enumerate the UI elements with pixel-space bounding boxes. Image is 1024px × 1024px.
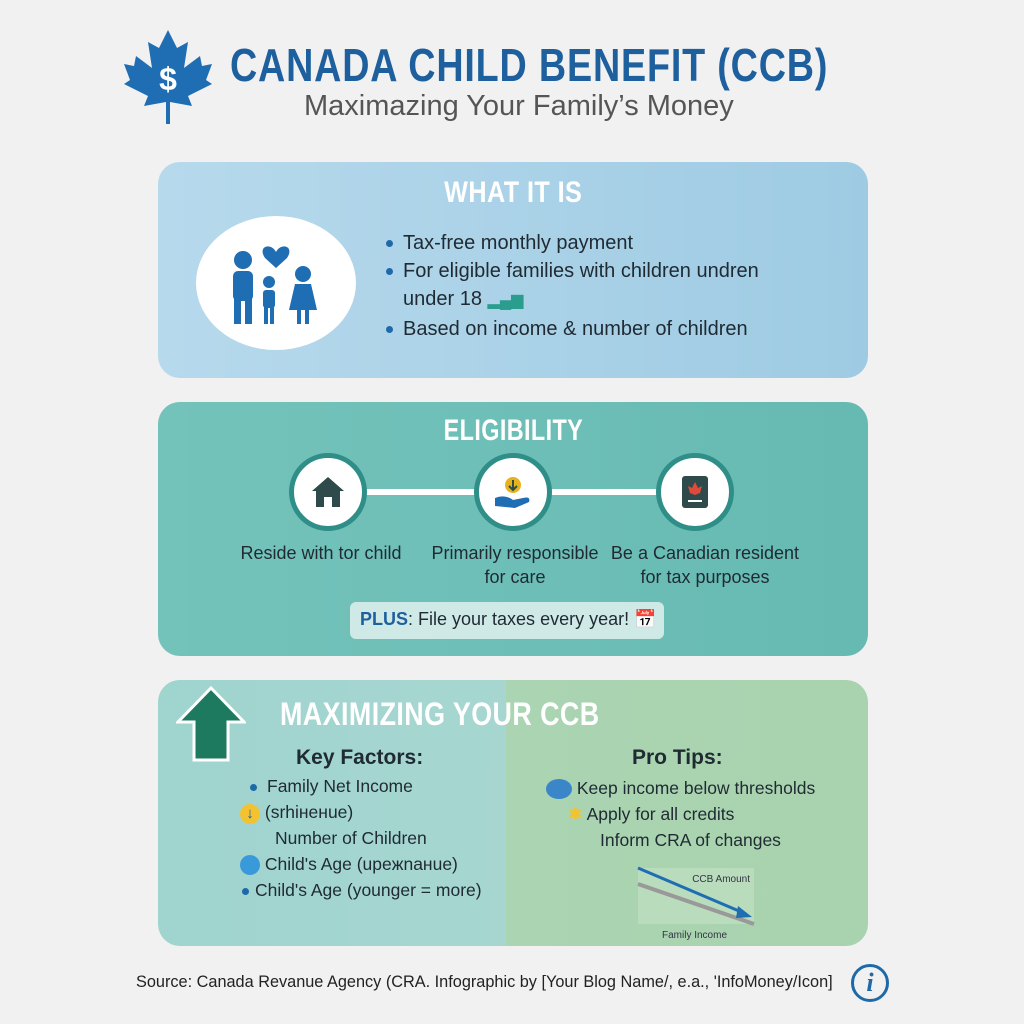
- text: key factors: Number of Children: [275, 828, 427, 848]
- chart: ccb amount vs income: CCB Amount: [692, 874, 750, 885]
- text: key factors: Child's Age (younger = more): [255, 880, 482, 900]
- text: what it is bullets: Tax-free monthly payment: [403, 232, 633, 254]
- icon: info: [851, 964, 889, 1002]
- icon: hand: [474, 453, 552, 531]
- text: resident: Be a Canadian resident: [611, 543, 799, 563]
- text: what it is bullets: under 18 ▂▄▆: [403, 288, 523, 310]
- icon: house: [289, 453, 367, 531]
- title: CANADA CHILD BENEFIT (CCB): [230, 39, 828, 91]
- text: pro tips: Keep income below thresholds: [577, 778, 815, 798]
- text: resident: [611, 543, 799, 587]
- text: key factors: Child's Age (upeжnaнue): [265, 854, 458, 874]
- text: pro tips: Pro Tips:: [632, 746, 723, 769]
- text: what it is bullets: [386, 232, 759, 340]
- heading: what it is: WHAT IT IS: [444, 176, 582, 209]
- text: pro tips: [546, 746, 815, 850]
- chart: ccb amount vs income: [637, 866, 755, 941]
- icon: maple leaf with dollar: $: [159, 61, 177, 97]
- text: what it is bullets: Based on income & number of children: [403, 318, 748, 340]
- callout: plus file taxes: [350, 602, 664, 639]
- text: key factors: Key Factors:: [296, 746, 423, 769]
- icon: up arrow: [176, 686, 246, 762]
- icon: family circle: [196, 216, 356, 350]
- icon: maple leaf with dollar: [124, 30, 212, 124]
- text: responsible: for care: [484, 567, 546, 587]
- text: resident: for tax purposes: [640, 567, 770, 587]
- connector line: [328, 489, 698, 495]
- text: key factors: Family Net Income: [267, 776, 413, 796]
- text: reside: Reside with tor child: [240, 543, 402, 563]
- heading: eligibility: ELIGIBILITY: [443, 414, 583, 447]
- icon: passport: [656, 453, 734, 531]
- text: responsible: Primarily responsible: [431, 543, 599, 563]
- text: responsible: [431, 543, 599, 587]
- text: pro tips: Inform CRA of changes: [600, 830, 781, 850]
- heading: maximizing: MAXIMIZING YOUR CCB: [280, 696, 600, 732]
- subtitle: Maximazing Your Family’s Money: [304, 90, 734, 122]
- panel: eligibility: [158, 402, 868, 656]
- text: pro tips: ✱ Apply for all credits: [568, 804, 734, 824]
- text: key factors: [240, 746, 482, 900]
- footer: source: Source: Canada Revanue Agency (CRA. Infographic by [Your Blog Name/, e.a., 'InfoMoney/Icon]: [136, 973, 833, 991]
- text: what it is bullets: For eligible families with children undren: [403, 260, 759, 282]
- text: key factors: ↓: [246, 805, 254, 822]
- chart: ccb amount vs income: Family Income: [662, 930, 727, 941]
- text: key factors: (srhiнeнue): [265, 802, 353, 822]
- panel: maximizing: [158, 680, 868, 946]
- callout: plus file taxes: PLUS: File your taxes every year! 📅: [360, 609, 657, 629]
- icon: info: i: [866, 968, 874, 997]
- panel: what it is: [158, 162, 868, 378]
